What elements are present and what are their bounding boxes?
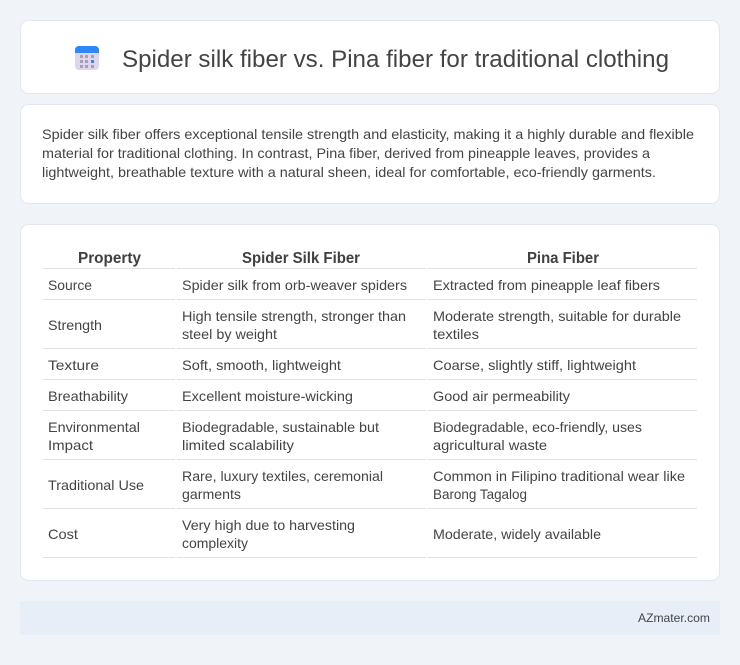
row: texture [48,357,636,373]
row: environmental impact: Environmental [48,419,140,435]
row: breathability: Good air permeability [433,388,570,404]
row: cost: Cost [48,526,78,542]
row: strength: textiles [433,326,479,342]
row: environmental impact: limited scalability [182,437,294,453]
row: strength: steel by weight [182,326,277,342]
row: environmental impact [48,419,642,453]
row: texture: Texture [48,357,99,373]
row: cost [48,517,601,551]
row: traditional use: Barong Tagalog [433,486,527,502]
row: breathability: Excellent moisture-wicking [182,388,353,404]
row: environmental impact: Biodegradable, eco-friendly, uses [433,419,642,435]
table header: Property [78,250,141,267]
row: texture: Coarse, slightly stiff, lightweight [433,357,636,373]
row: environmental impact: Biodegradable, sustainable but [182,419,379,435]
row: traditional use: Traditional Use [48,477,144,493]
row: traditional use: garments [182,486,241,502]
row: cost: Moderate, widely available [433,526,601,542]
title: Spider silk fiber vs. Pina fiber for traditional clothing [122,46,669,73]
panel: title card [20,20,720,94]
footer: AZmater.com [638,611,710,625]
row: traditional use: Common in Filipino traditional wear like [433,468,685,484]
row: environmental impact: Impact [48,437,93,453]
panel: introduction: lightweight, breathable texture with a natural sheen, ideal for comfortable, eco-friendly garments. [42,164,656,180]
row: source: Source [48,277,92,293]
row: environmental impact: agricultural waste [433,437,547,453]
table header: Spider Silk Fiber [242,250,360,267]
row: traditional use [48,468,685,502]
row: strength: High tensile strength, stronger than [182,308,406,324]
table header: Pina Fiber [527,250,599,267]
footer [20,601,720,635]
row: cost: complexity [182,535,248,551]
row: strength: Moderate strength, suitable for durable [433,308,681,324]
row: texture: Soft, smooth, lightweight [182,357,341,373]
panel: comparison table [20,224,720,580]
row: cost: Very high due to harvesting [182,517,355,533]
icon: calendar [75,46,99,70]
table header [78,250,599,267]
panel: introduction [20,104,720,204]
row: source [48,277,660,293]
row: source: Extracted from pineapple leaf fibers [433,277,660,293]
panel: introduction: material for traditional clothing. In contrast, Pina fiber, derived from pineapple leaves, provides a [42,145,650,161]
row: strength: Strength [48,317,102,333]
row: traditional use: Rare, luxury textiles, ceremonial [182,468,383,484]
row: breathability [48,388,570,404]
panel: introduction: Spider silk fiber offers exceptional tensile strength and elasticity, making it a highly durable and flexible [42,126,694,142]
row: source: Spider silk from orb-weaver spiders [182,277,407,293]
row: strength [48,308,681,342]
row: breathability: Breathability [48,388,128,404]
